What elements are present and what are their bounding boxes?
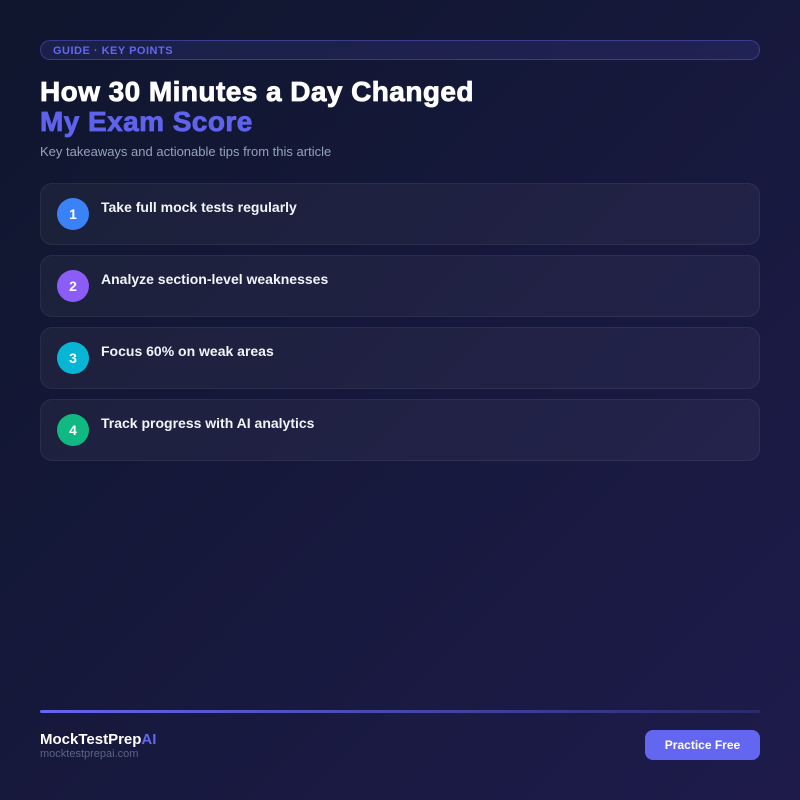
panel: takeaway 2 [40,255,760,317]
button: practice free [645,730,760,760]
brand name: MockTestPrepAI [40,731,156,748]
badge: guide key points: GUIDE · KEY POINTS [53,45,173,57]
title: How 30 Minutes a Day Changed [40,76,474,107]
footer accent bar [40,710,760,713]
icon: number 3 [57,342,89,374]
icon: number 3: 3 [69,350,77,366]
icon: number 1 [57,198,89,230]
subtitle: Key takeaways and actionable tips from this article [40,144,331,159]
panel: takeaway 4 [40,399,760,461]
icon: number 4: 4 [69,422,77,438]
icon: number 4 [57,414,89,446]
button: practice free: Practice Free [665,738,740,752]
text: takeaway 2: Analyze section-level weaknesses [101,271,328,287]
title [40,76,474,138]
text: takeaway 1: Take full mock tests regularly [101,199,297,215]
text: takeaway 3: Focus 60% on weak areas [101,343,274,359]
panel: takeaway 1 [40,183,760,245]
title: My Exam Score [40,106,253,137]
panel: takeaway 3 [40,327,760,389]
icon: number 2: 2 [69,278,77,294]
icon: number 2 [57,270,89,302]
icon: number 1: 1 [69,206,77,222]
badge: guide key points [40,40,760,60]
website url: mocktestprepai.com [40,748,138,760]
text: takeaway 4: Track progress with AI analytics [101,415,314,431]
